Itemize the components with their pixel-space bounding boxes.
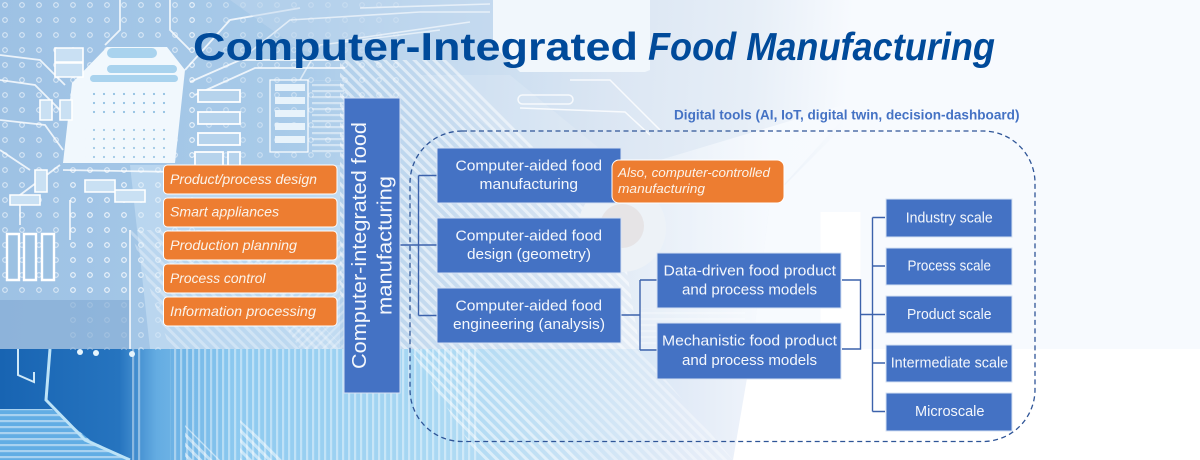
main bar: computer-integrated food manufacturing: manufacturing	[374, 176, 396, 315]
item: smart appliances: Smart appliances	[170, 204, 279, 220]
main bar: computer-integrated food manufacturing	[344, 98, 400, 393]
item: smart appliances	[164, 198, 337, 227]
callout: computer-controlled manufacturing: Also, computer-controlled	[617, 165, 771, 180]
item: information processing: Information processing	[170, 303, 316, 319]
item: production planning: Production planning	[170, 237, 297, 253]
box: intermediate scale: Intermediate scale	[891, 356, 1008, 372]
item: process control: Process control	[170, 270, 266, 286]
box: mechanistic models: and process models	[682, 353, 817, 369]
title: Computer-Integrated	[193, 26, 638, 69]
box: product scale: Product scale	[907, 307, 992, 323]
box: data-driven models: and process models	[682, 282, 817, 298]
title	[193, 26, 995, 69]
box: industry scale: Industry scale	[906, 210, 993, 226]
box: data-driven models	[657, 253, 841, 308]
box: microscale: Microscale	[915, 404, 984, 420]
subtitle: digital tools: Digital tools (AI, IoT, digital twin, decision-dashboard)	[674, 106, 1020, 122]
box: process scale: Process scale	[908, 258, 991, 274]
item: product/process design	[164, 165, 337, 194]
box: computer-aided food engineering: Computer-aided food	[456, 298, 602, 314]
item: production planning	[164, 231, 337, 260]
panel: applications list	[164, 165, 337, 326]
box: computer-aided food design: design (geometry)	[467, 247, 591, 263]
connectors: models to scales	[842, 218, 885, 412]
box: data-driven models: Data-driven food product	[664, 264, 836, 280]
connectors: engineering to models	[621, 280, 657, 350]
item: information processing	[164, 297, 337, 326]
box: computer-aided food manufacturing: manufacturing	[480, 177, 578, 193]
panel: dashed digital tools boundary	[410, 131, 1035, 442]
box: product scale	[886, 296, 1012, 333]
box: computer-aided food engineering: engineering (analysis)	[453, 317, 605, 333]
item: process control	[164, 264, 337, 293]
callout: computer-controlled manufacturing: manufacturing	[618, 181, 706, 196]
connectors: main bar to computer-aided boxes	[400, 176, 437, 316]
box: computer-aided food design: Computer-aided food	[456, 228, 602, 244]
box: industry scale	[886, 199, 1012, 237]
item: product/process design: Product/process design	[170, 171, 317, 187]
callout: computer-controlled manufacturing	[612, 160, 784, 203]
box: computer-aided food manufacturing	[437, 148, 621, 203]
box: mechanistic models	[657, 323, 841, 379]
box: intermediate scale	[886, 345, 1012, 382]
box: computer-aided food manufacturing: Computer-aided food	[456, 158, 602, 174]
box: microscale	[886, 393, 1012, 431]
title: Food Manufacturing	[648, 26, 995, 69]
box: computer-aided food engineering	[437, 288, 621, 343]
box: computer-aided food design	[437, 218, 621, 273]
main bar: computer-integrated food manufacturing: Computer-integrated food	[349, 122, 371, 369]
box: process scale	[886, 248, 1012, 285]
box: mechanistic models: Mechanistic food product	[662, 334, 837, 350]
